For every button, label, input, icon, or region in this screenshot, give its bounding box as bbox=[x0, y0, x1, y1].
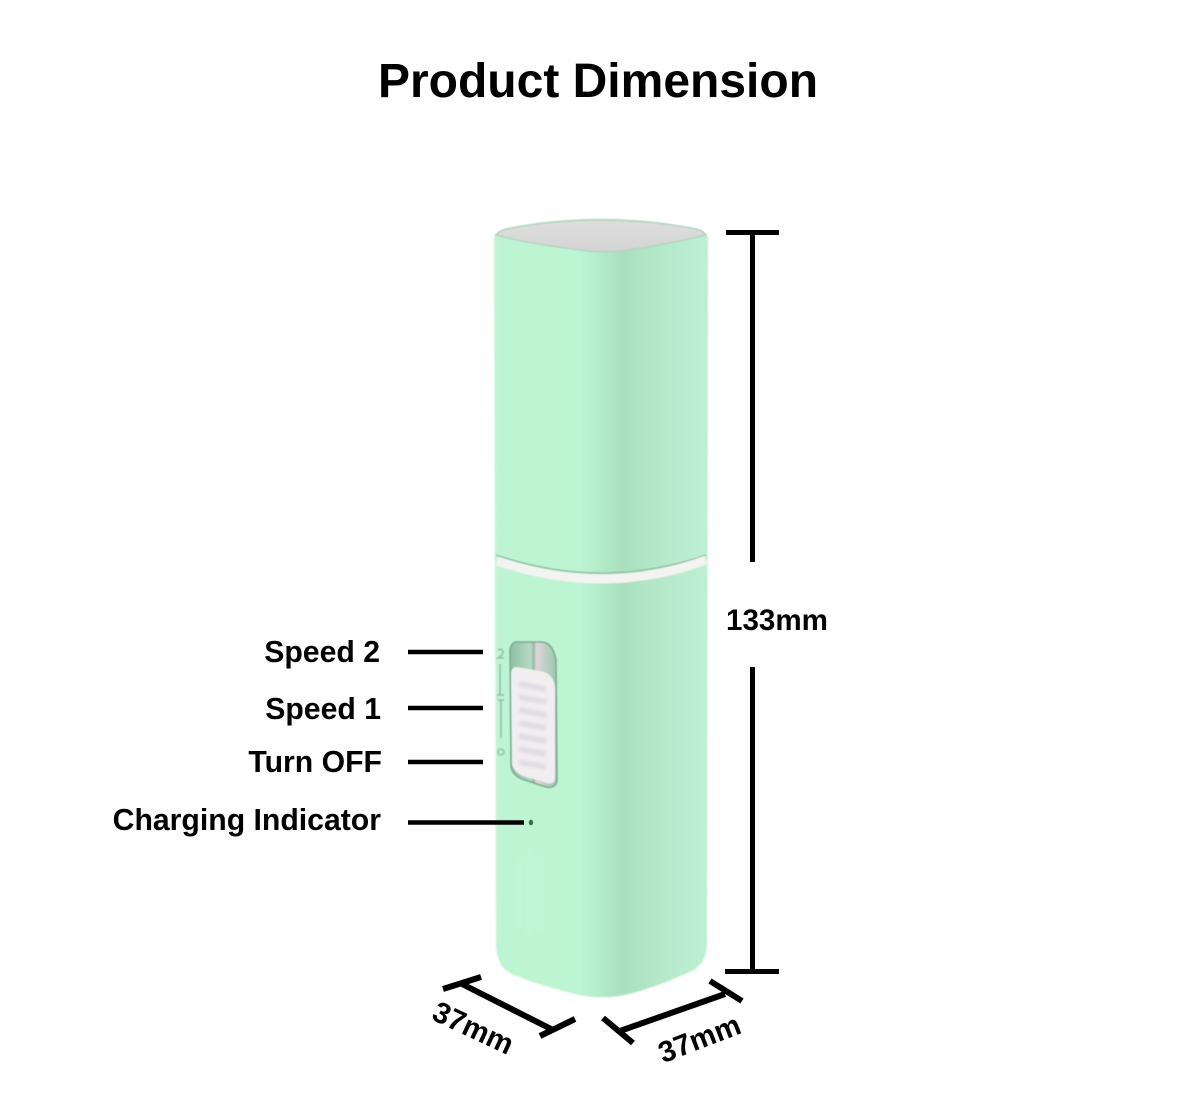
white band between cap and base bbox=[496, 555, 706, 579]
device top cap bbox=[496, 220, 706, 252]
slider grip ridges bbox=[519, 684, 546, 767]
device body bbox=[494, 219, 708, 997]
height dimension: 133mm: 133mm bbox=[726, 604, 828, 637]
charging indicator dot bbox=[529, 820, 533, 825]
depth dimension: right 37mm: 37mm bbox=[654, 1008, 745, 1070]
embossed logo on body bbox=[519, 850, 539, 936]
label: Turn OFF: Turn OFF bbox=[248, 746, 382, 779]
switch slider bbox=[511, 667, 555, 783]
width dimension: left 37mm: 37mm bbox=[427, 995, 519, 1061]
slide switch bbox=[510, 642, 557, 787]
title: Product Dimension bbox=[378, 55, 818, 108]
label: Speed 1: Speed 1 bbox=[265, 693, 381, 726]
speed markings printed on body bbox=[497, 649, 504, 755]
label: Charging Indicator: Charging Indicator bbox=[113, 804, 381, 837]
depth dimension: right 37mm bbox=[603, 981, 745, 1070]
label: Speed 2: Speed 2 bbox=[264, 636, 380, 669]
width dimension: left 37mm bbox=[427, 977, 575, 1061]
switch window bbox=[510, 642, 557, 787]
product: green device body bbox=[494, 219, 708, 997]
